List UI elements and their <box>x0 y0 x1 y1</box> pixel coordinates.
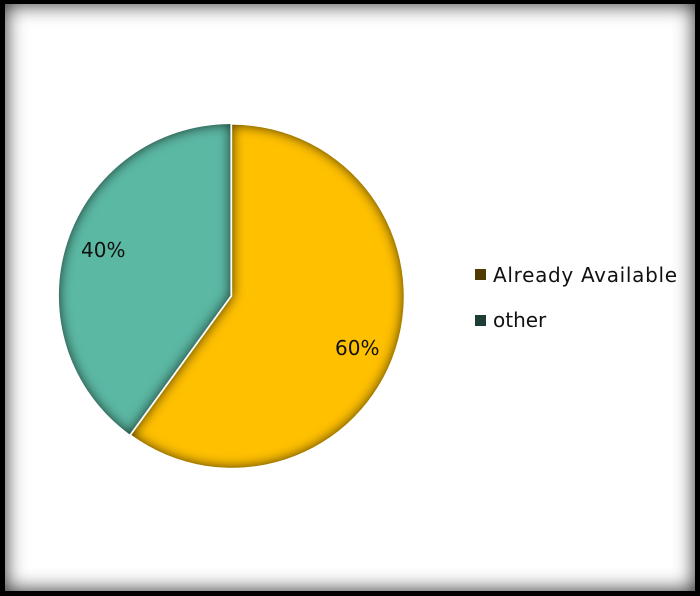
legend label: Already Available: Already Available <box>493 263 677 287</box>
label: 60%: 60% <box>335 336 379 360</box>
label: 40%: 40% <box>81 238 125 262</box>
legend label: other: other <box>493 308 547 332</box>
legend <box>475 263 677 332</box>
legend swatch: other <box>475 315 486 326</box>
pie slice: Already Available 60% <box>131 125 404 468</box>
pie slice: other 40% <box>59 124 230 434</box>
legend swatch: Already Available <box>475 269 486 280</box>
